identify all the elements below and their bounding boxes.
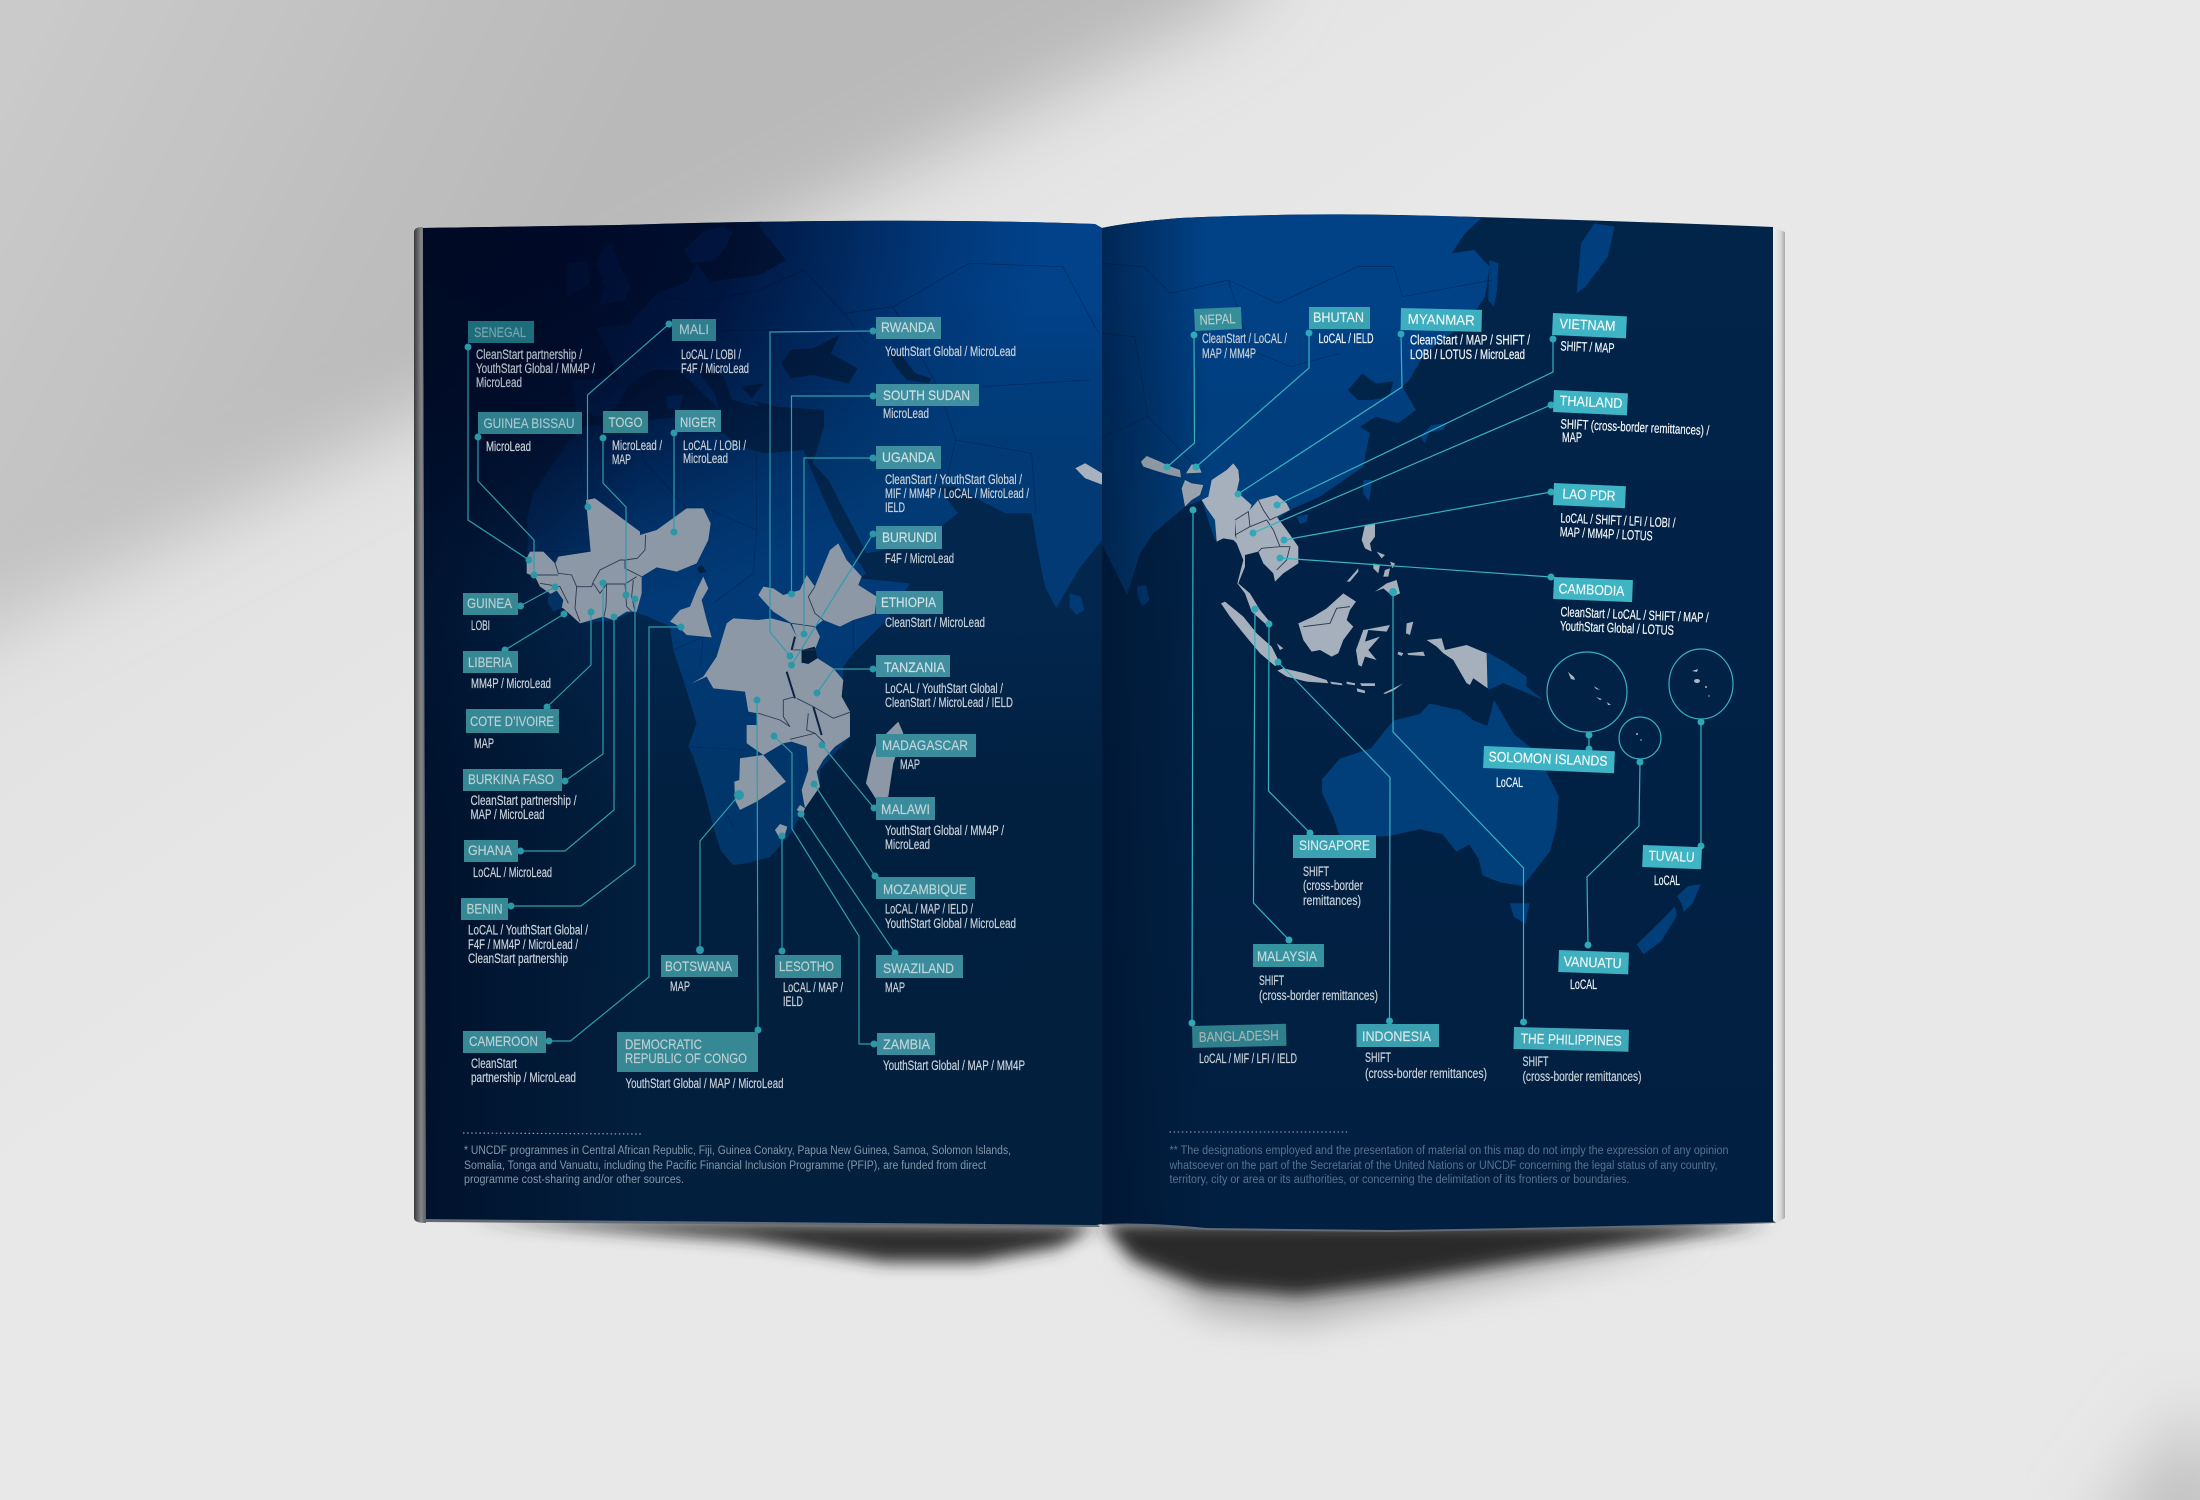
label: Lesotho: IELD: [783, 994, 803, 1009]
small islands inside circles: [1568, 669, 1710, 741]
label: Uganda: CleanStart / YouthStart Global /: [885, 472, 1022, 487]
label: Swaziland: [876, 955, 963, 995]
label: Lao PDR: MAP / MM4P / LOTUS: [1559, 524, 1653, 544]
label: Swaziland: MAP: [885, 980, 905, 995]
label: Democratic Republic of Congo: [617, 1032, 784, 1091]
leader lines left: [468, 324, 895, 1044]
label: Tuvalu: [1642, 845, 1702, 869]
label: Uganda: UGANDA: [882, 449, 936, 465]
label: Liberia: [463, 651, 551, 691]
label: Lao PDR: [1551, 483, 1677, 545]
label: Democratic Republic of Congo: YouthStart Global / MAP / MicroLead: [626, 1076, 784, 1091]
label: Guinea Bissau: MicroLead: [486, 439, 531, 454]
label: South Sudan: SOUTH SUDAN: [883, 387, 970, 403]
label: Guinea: LOBI: [471, 618, 490, 633]
label: Tanzania: CleanStart / MicroLead / IELD: [885, 695, 1013, 710]
label: Benin: LoCAL / YouthStart Global /: [468, 922, 588, 938]
sublabel: The Philippines: SHIFT: [1522, 1054, 1548, 1069]
label: Malawi: YouthStart Global / MM4P /: [885, 823, 1004, 838]
label: Ethiopia: [876, 591, 985, 630]
footnote right: whatsoever on the part of the Secretariat of the United Nations or UNCDF concerning the legal status of any country,: [1169, 1160, 1718, 1172]
label: Guinea Bissau: GUINEA BISSAU: [484, 415, 574, 431]
gray programme countries Asia: [1141, 456, 1488, 694]
label: Cambodia: CleanStart / LoCAL / SHIFT / MAP /: [1560, 604, 1709, 625]
label: Thailand: SHIFT (cross-border remittances) /: [1560, 416, 1710, 438]
label: Cambodia: CAMBODIA: [1558, 580, 1625, 599]
label: Mali: F4F / MicroLead: [681, 361, 749, 376]
label: Lesotho: LESOTHO: [779, 958, 834, 974]
label: Malaysia: SHIFT: [1259, 973, 1284, 988]
footnote right: [1169, 1132, 1728, 1186]
leader dots right: [1164, 330, 1704, 1026]
footnote left: * UNCDF programmes in Central African Republic, Fiji, Guinea Conakry, Papua New Guinea, Samoa, Solomon Islands,: [464, 1145, 1011, 1157]
label: Cambodia: YouthStart Global / LOTUS: [1560, 618, 1674, 638]
label: Madagascar: MAP: [900, 757, 920, 772]
label: Liberia: MM4P / MicroLead: [471, 676, 551, 691]
sublabel: Nepal: MAP / MM4P: [1202, 346, 1256, 361]
label: Botswana: [661, 955, 738, 994]
label: Cameroon: [463, 1031, 576, 1085]
label: Benin: F4F / MM4P / MicroLead /: [468, 937, 578, 952]
label: The Philippines: [1513, 1027, 1629, 1052]
label: Thailand: [1552, 390, 1711, 438]
label: Malawi: MALAWI: [881, 801, 930, 817]
label: Cameroon: partnership / MicroLead: [471, 1070, 576, 1085]
label: South Sudan: MicroLead: [883, 406, 929, 421]
map: Eurasia left page: [567, 220, 1107, 615]
sublabel: Myanmar: LOBI / LOTUS / MicroLead: [1410, 347, 1525, 362]
label: Cote d'Ivoire: MAP: [474, 736, 494, 751]
label: Madagascar: [876, 734, 976, 772]
label: Singapore: [1293, 835, 1376, 908]
label: Bhutan: BHUTAN: [1313, 309, 1364, 325]
map: Papua New Guinea: [1487, 652, 1543, 700]
label: Ethiopia: CleanStart / MicroLead: [885, 615, 985, 630]
label: Botswana: MAP: [670, 979, 690, 994]
sublabel: Myanmar: [1410, 332, 1530, 362]
label: Thailand: THAILAND: [1559, 392, 1623, 411]
label: Democratic Republic of Congo: DEMOCRATIC: [625, 1036, 702, 1052]
map: Asia right page: [1099, 210, 1615, 607]
label: Uganda: MIF / MM4P / LoCAL / MicroLead /: [885, 486, 1029, 501]
label: Singapore: (cross-border: [1303, 878, 1363, 893]
footnote left: Somalia, Tonga and Vanuatu, including the Pacific Financial Inclusion Programme (PFIP), are funded from direct: [464, 1160, 987, 1172]
label: Botswana: BOTSWANA: [665, 958, 733, 974]
label: South Sudan: [876, 384, 979, 421]
label: Rwanda: YouthStart Global / MicroLead: [885, 344, 1016, 359]
label: Burkina Faso: CleanStart partnership /: [470, 793, 577, 808]
label: Vanuatu: VANUATU: [1563, 953, 1622, 971]
label: Mali: [672, 319, 749, 376]
label: Togo: MicroLead /: [612, 438, 662, 453]
label: Ethiopia: ETHIOPIA: [881, 594, 937, 610]
map: Australia, Tasmania and New Zealand: [1322, 700, 1701, 954]
sublabel: Bangladesh: LoCAL / MIF / LFI / IELD: [1199, 1051, 1297, 1066]
label: Tanzania: TANZANIA: [884, 659, 946, 675]
label: Tanzania: LoCAL / YouthStart Global /: [885, 681, 1003, 696]
label: Senegal: YouthStart Global / MM4P /: [476, 361, 595, 376]
label: Togo: TOGO: [608, 414, 643, 430]
label: Tanzania: [876, 655, 1013, 710]
label: Lesotho: LoCAL / MAP /: [783, 980, 843, 995]
label: Zambia: ZAMBIA: [883, 1036, 931, 1052]
label: Indonesia: [1356, 1024, 1487, 1081]
label: Indonesia: (cross-border remittances): [1365, 1066, 1487, 1081]
footnote left: programme cost-sharing and/or other sources.: [464, 1174, 684, 1186]
label: Burundi: F4F / MicroLead: [885, 551, 954, 566]
label: Vietnam: [1551, 313, 1627, 356]
label: Cambodia: [1552, 577, 1710, 639]
label: Niger: LoCAL / LOBI /: [683, 438, 746, 453]
label: Zambia: [877, 1033, 1025, 1073]
label: Benin: CleanStart partnership: [468, 951, 568, 966]
label: Mozambique: MOZAMBIQUE: [883, 881, 967, 897]
label: Cameroon: CAMEROON: [469, 1033, 538, 1049]
label: Cote d'Ivoire: [466, 709, 559, 751]
label: The Philippines: THE PHILIPPINES: [1521, 1030, 1622, 1049]
label: Swaziland: SWAZILAND: [883, 960, 954, 976]
label: Niger: NIGER: [680, 414, 716, 430]
spine shading: [1100, 205, 1220, 1235]
label: Ghana: LoCAL / MicroLead: [473, 865, 552, 880]
label: Mali: MALI: [679, 321, 709, 337]
label: Indonesia: INDONESIA: [1362, 1028, 1432, 1044]
label: Burundi: [876, 526, 954, 566]
label: Senegal: SENEGAL: [474, 324, 526, 340]
label: Malawi: MicroLead: [885, 837, 930, 852]
map: Africa left page: [527, 417, 910, 865]
label: Burkina Faso: MAP / MicroLead: [470, 807, 544, 822]
label: Mozambique: LoCAL / MAP / IELD /: [885, 902, 973, 916]
label: Uganda: IELD: [885, 500, 905, 515]
label: Mozambique: YouthStart Global / MicroLead: [885, 916, 1016, 931]
panel: left page map and labels: [414, 210, 1107, 1230]
sublabel: Nepal: CleanStart / LoCAL /: [1202, 331, 1287, 346]
label: Singapore: remittances): [1303, 893, 1361, 908]
gray programme countries Africa: [527, 498, 903, 836]
label: Senegal: [468, 321, 595, 390]
sublabel: Solomon Islands: LoCAL: [1496, 775, 1523, 790]
label: Myanmar: MYANMAR: [1408, 311, 1475, 328]
footnote right: ** The designations employed and the presentation of material on this map do not imply the expression of any opinion: [1170, 1145, 1728, 1157]
label: Tuvalu: TUVALU: [1648, 847, 1695, 865]
sublabel: Myanmar: CleanStart / MAP / SHIFT /: [1410, 332, 1530, 348]
footnote right: territory, city or area or its authorities, or concerning the delimitation of its frontiers or boundaries.: [1170, 1174, 1630, 1186]
map: Hainan island: [1297, 514, 1308, 524]
label: Rwanda: RWANDA: [881, 319, 936, 335]
label: Lesotho: [775, 955, 843, 1009]
label: Cameroon: CleanStart: [471, 1056, 517, 1071]
footnote left: [463, 1133, 1011, 1186]
label: Myanmar: [1401, 308, 1482, 332]
label: Cote d'Ivoire: COTE D’IVOIRE: [470, 713, 554, 729]
book outer edges: [414, 227, 1785, 1232]
label: Nepal: [1194, 307, 1242, 331]
label: Ghana: GHANA: [468, 842, 513, 858]
sublabel: The Philippines: (cross-border remittances): [1522, 1069, 1642, 1084]
label: Togo: MAP: [612, 452, 631, 467]
label: Burundi: BURUNDI: [882, 529, 937, 545]
label: Mozambique: [876, 877, 1016, 931]
label: Burkina Faso: [463, 769, 577, 822]
label: Zambia: YouthStart Global / MAP / MM4P: [883, 1058, 1025, 1073]
label: Uganda: [876, 446, 1029, 515]
label: Lao PDR: LoCAL / SHIFT / LFI / LOBI /: [1560, 510, 1676, 531]
label: Togo: [603, 411, 662, 467]
label: Rwanda: [876, 317, 1016, 359]
leader lines right: [1167, 333, 1701, 1023]
label: Senegal: CleanStart partnership /: [476, 347, 582, 362]
label: Guinea: GUINEA: [467, 595, 513, 611]
label: Bhutan: [1309, 307, 1374, 346]
label: Burkina Faso: BURKINA FASO: [468, 771, 554, 787]
label: Madagascar: MADAGASCAR: [882, 737, 968, 753]
label: Vietnam: VIETNAM: [1559, 315, 1616, 334]
label: Senegal: MicroLead: [476, 375, 522, 390]
label: Bhutan: LoCAL / IELD: [1318, 331, 1374, 346]
label: Niger: MicroLead: [683, 451, 728, 466]
label: Indonesia: SHIFT: [1365, 1050, 1391, 1065]
label: Malaysia: [1253, 944, 1378, 1003]
label: Niger: [675, 410, 746, 466]
label: Vietnam: SHIFT / MAP: [1560, 338, 1615, 356]
label: Mali: LoCAL / LOBI /: [681, 347, 741, 362]
label: Singapore: SINGAPORE: [1299, 837, 1370, 853]
label: Democratic Republic of Congo: REPUBLIC OF CONGO: [625, 1050, 747, 1066]
label: Ghana: [464, 840, 552, 880]
label: Solomon Islands: SOLOMON ISLANDS: [1488, 748, 1608, 769]
sublabel: Thailand: MAP: [1562, 430, 1582, 445]
shading overlay: [423, 220, 994, 1220]
label: Bangladesh: BANGLADESH: [1199, 1027, 1279, 1045]
label: Liberia: LIBERIA: [468, 654, 513, 670]
sublabel: Nepal: [1202, 331, 1287, 361]
leader dots left: [464, 320, 898, 1048]
gray Nepal fragment at spine: [1075, 463, 1103, 485]
sublabel: Tuvalu: LoCAL: [1654, 873, 1680, 888]
label: Singapore: SHIFT: [1303, 864, 1329, 879]
panel: right page map and labels: [1099, 205, 1785, 1235]
label: Malaysia: MALAYSIA: [1257, 948, 1318, 964]
label: Malaysia: (cross-border remittances): [1259, 988, 1378, 1003]
sublabel: The Philippines: [1522, 1054, 1642, 1084]
label: Benin: [461, 898, 588, 966]
label: Bangladesh: [1192, 1024, 1287, 1048]
label: Benin: BENIN: [466, 900, 502, 916]
label: Vanuatu: [1558, 950, 1629, 974]
label: Guinea Bissau: [478, 412, 582, 454]
label: Lao PDR: LAO PDR: [1562, 485, 1616, 504]
label: Guinea: [463, 593, 518, 633]
book shadow: [470, 1220, 1770, 1322]
label: Malawi: [876, 797, 1004, 852]
inset circles with islands: [1547, 649, 1733, 759]
sublabel: Vanuatu: LoCAL: [1570, 977, 1597, 992]
label: Nepal: NEPAL: [1199, 310, 1236, 328]
